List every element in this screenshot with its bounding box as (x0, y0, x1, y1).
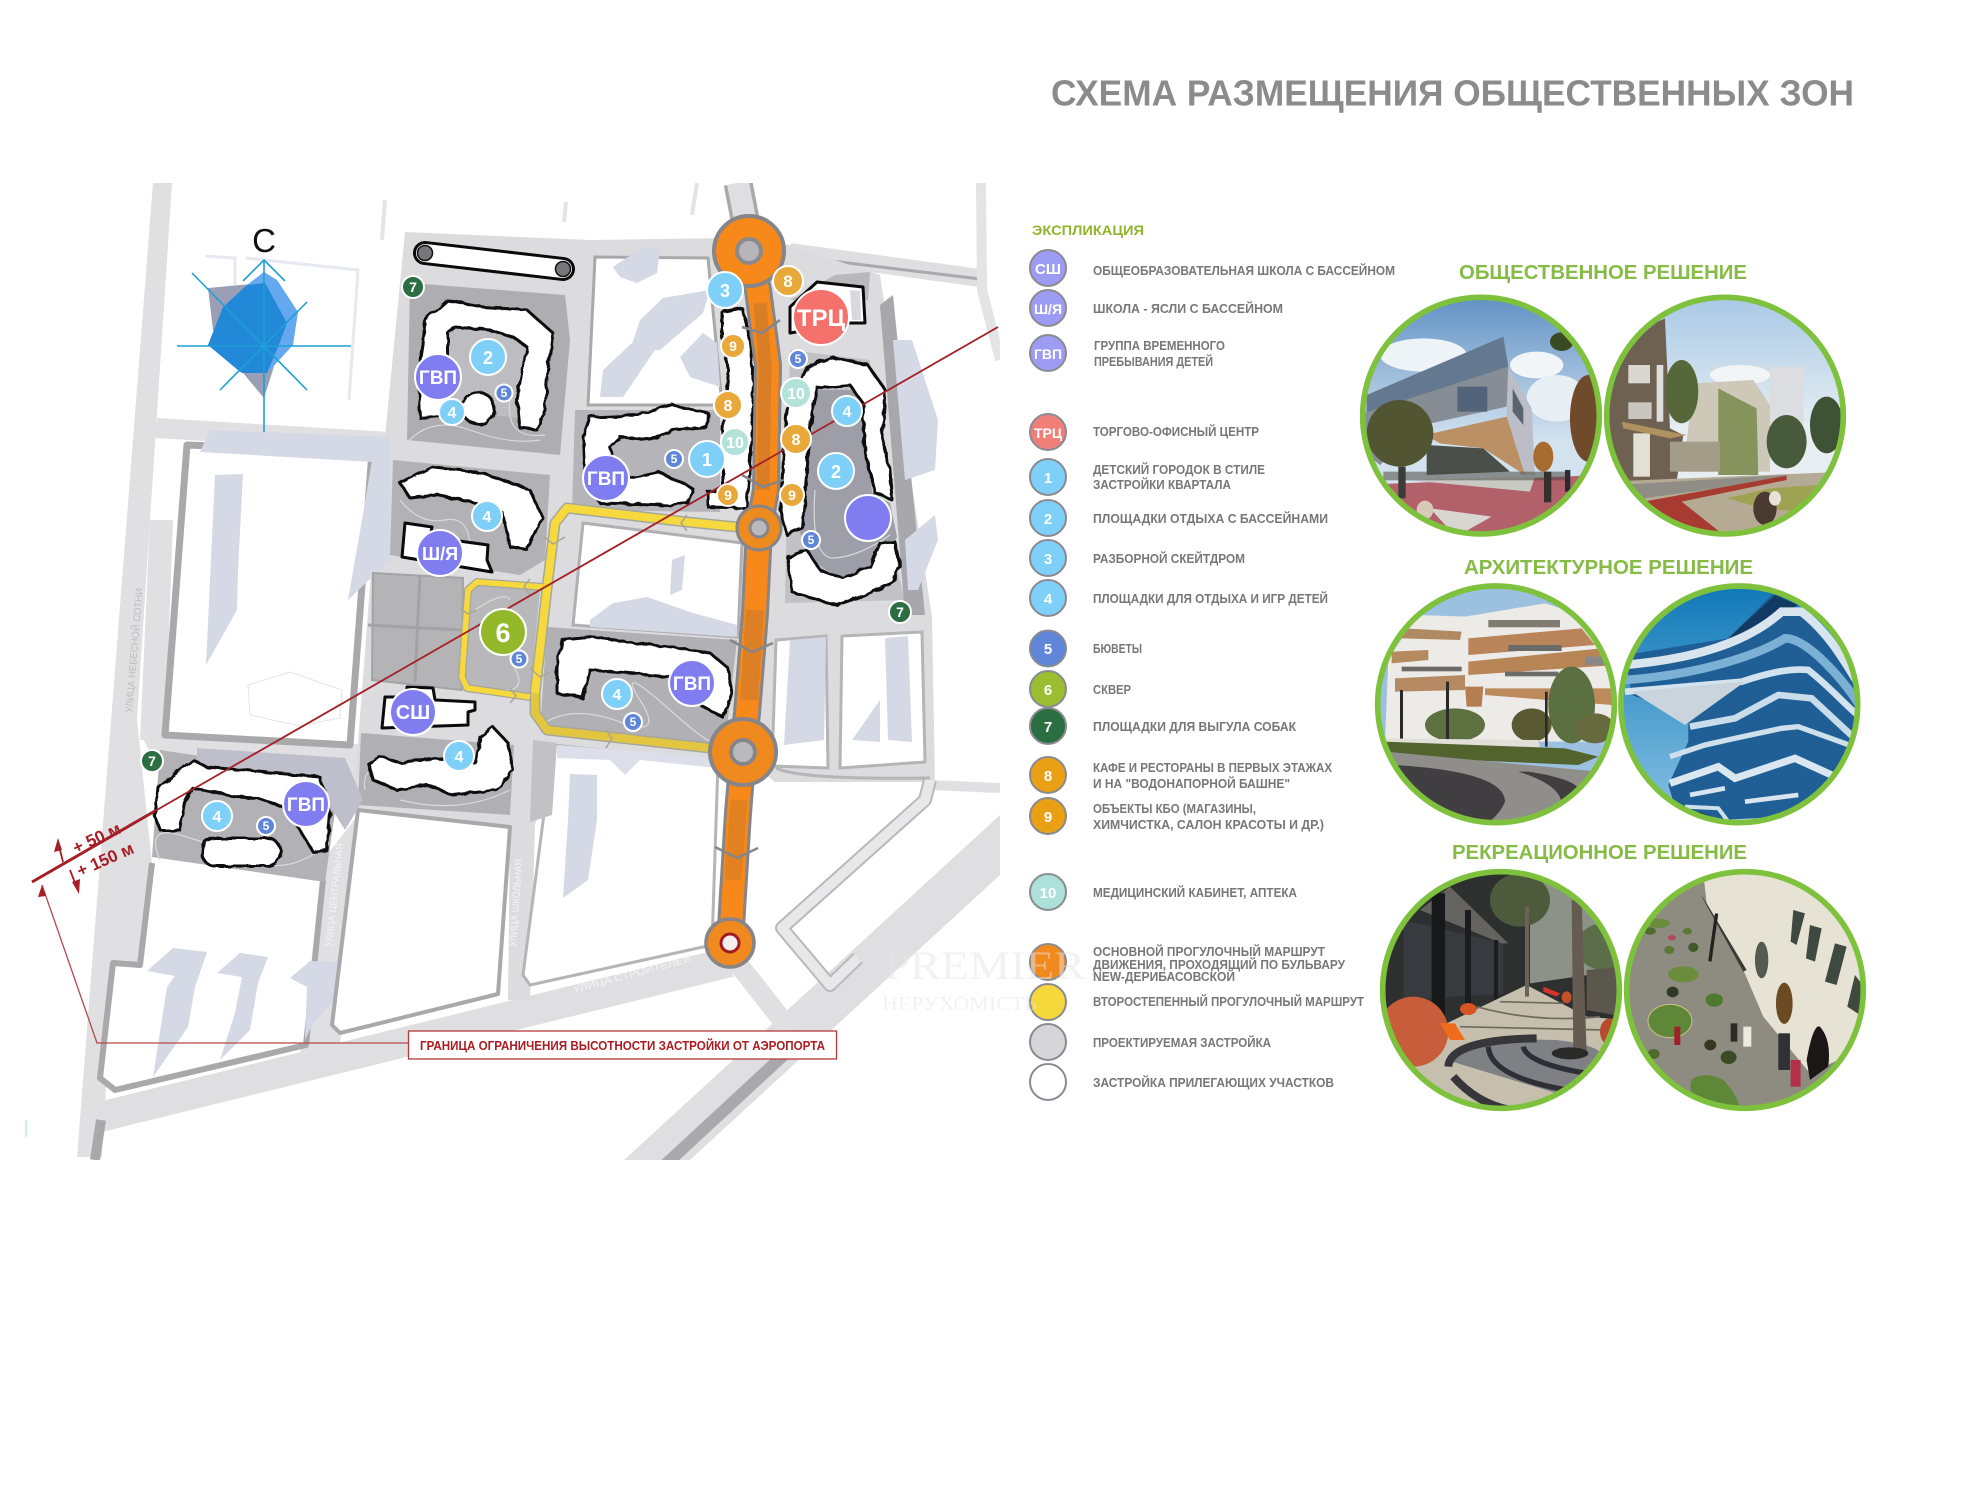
building: shopping and office centre (790, 282, 865, 333)
legend: 5: БЮВЕТЫ (1093, 641, 1142, 656)
legend: 5 (1030, 630, 1142, 666)
compass backdrop lines (205, 256, 235, 285)
central-south parcel (332, 810, 510, 1033)
marker 2: 2 (831, 462, 841, 482)
airport restriction callout (408, 1031, 836, 1059)
legend: main route (1030, 944, 1346, 984)
marker 9: 9 (788, 487, 796, 503)
legend (1030, 250, 1395, 1100)
main walking route (orange) (706, 216, 784, 967)
marker ГВП (583, 455, 629, 501)
legend: main route: NEW-ДЕРИБАСОВСКОЙ (1093, 969, 1235, 984)
marker Ш/Я: Ш/Я (422, 544, 458, 564)
marker 2 (470, 339, 506, 375)
south-east lower road curve (776, 768, 930, 778)
legend: 7 (1030, 708, 1296, 744)
marker 8 (773, 266, 803, 296)
marker 1: 1 (702, 450, 712, 470)
marker blank purple (845, 495, 891, 541)
legend: 8: 8 (1044, 768, 1052, 785)
marker 8: 8 (783, 272, 793, 291)
watermark: НЕРУХОМІСТЬ (882, 993, 1037, 1015)
legend: adjacent buildings: ЗАСТРОЙКА ПРИЛЕГАЮЩИХ УЧАСТКОВ (1093, 1075, 1334, 1090)
legend: secondary route: ВТОРОСТЕПЕННЫЙ ПРОГУЛОЧНЫЙ МАРШРУТ (1093, 994, 1364, 1009)
marker 8 (781, 424, 811, 454)
marker 4: 4 (448, 405, 457, 422)
street names: УЛИЦА ЦЕНТРАЛЬНАЯ (324, 843, 346, 947)
street names: УЛИЦА НЕБЕСНОЙ СОТНИ (122, 588, 146, 713)
legend: 3: 3 (1044, 551, 1052, 568)
legend: Ш/Я: Ш/Я (1034, 301, 1062, 317)
compass wind rose (177, 222, 351, 432)
legend: 6: 6 (1044, 682, 1052, 699)
photo: promenade with orange spheres (1378, 870, 1630, 1113)
legend: ТРЦ: ТРЦ (1034, 425, 1063, 441)
marker 4 (439, 399, 465, 425)
marker ГВП: ГВП (419, 368, 457, 389)
marker 4 (602, 679, 632, 709)
legend: ТРЦ: ТОРГОВО-ОФИСНЫЙ ЦЕНТР (1093, 424, 1259, 439)
marker 8: 8 (724, 398, 733, 415)
marker 5: 5 (630, 715, 637, 729)
marker 7 (889, 601, 911, 623)
marker ГВП (669, 660, 715, 706)
legend: СШ (1030, 250, 1395, 286)
marker 9: 9 (729, 338, 737, 354)
marker 9: 9 (724, 487, 732, 503)
legend: ГВП: ПРЕБЫВАНИЯ ДЕТЕЙ (1094, 354, 1213, 369)
yellow route arrows (460, 515, 687, 748)
legend: 3 (1030, 540, 1245, 576)
legend: 4: ПЛОЩАДКИ ДЛЯ ОТДЫХА И ИГР ДЕТЕЙ (1093, 591, 1328, 606)
marker 9 (721, 334, 745, 358)
marker 4: 4 (213, 809, 222, 826)
legend: 8 (1030, 757, 1332, 793)
heading: recreational solution: РЕКРЕАЦИОННОЕ РЕШЕНИЕ (1452, 842, 1747, 864)
marker 4 (444, 741, 474, 771)
main route chevrons (715, 320, 783, 858)
legend: planned buildings: ПРОЕКТИРУЕМАЯ ЗАСТРОЙКА (1093, 1035, 1272, 1050)
marker 5: 5 (516, 652, 523, 666)
marker СШ (390, 689, 436, 735)
photo: blue glass tower (1618, 585, 1862, 828)
height arrows and labels: + 150 м (74, 839, 137, 881)
legend: ГВП: ГРУППА ВРЕМЕННОГО (1094, 338, 1225, 353)
legend: ТРЦ (1030, 414, 1259, 450)
marker 5 (496, 384, 512, 402)
marker 5 (510, 650, 528, 668)
legend: 6 (1030, 671, 1131, 707)
legend: 8: И НА "ВОДОНАПОРНОЙ БАШНЕ" (1093, 776, 1290, 791)
courtyards (407, 283, 570, 455)
marker 5 (802, 531, 820, 549)
marker ГВП: ГВП (673, 674, 711, 695)
legend: Ш/Я: ШКОЛА - ЯСЛИ С БАССЕЙНОМ (1093, 301, 1283, 316)
marker 10: 10 (787, 386, 805, 403)
marker 5 (624, 713, 642, 731)
marker 3 (707, 272, 743, 308)
marker 4 (472, 501, 502, 531)
legend: 5: 5 (1044, 641, 1052, 658)
marker 4: 4 (455, 749, 464, 766)
legend: 10: 10 (1040, 885, 1056, 902)
marker 5: 5 (263, 819, 270, 833)
legend: 2 (1030, 500, 1328, 536)
legend: 10 (1030, 874, 1298, 910)
marker 10 (721, 428, 749, 456)
road network and parcels (77, 183, 1000, 1165)
street names (122, 588, 693, 996)
legend: 7: 7 (1044, 719, 1052, 736)
watermark (882, 943, 1085, 1015)
marker 2 (818, 453, 854, 489)
marker 9 (780, 483, 804, 507)
legend: 1: 1 (1044, 470, 1052, 487)
marker 4: 4 (613, 687, 622, 704)
marker 5 (789, 350, 807, 368)
legend: 1: ЗАСТРОЙКИ КВАРТАЛА (1093, 477, 1232, 492)
south-east parcels (772, 636, 828, 768)
legend: secondary route (1030, 984, 1364, 1020)
street names: УЛИЦА СТРОИТЕЛЕЙ (571, 952, 693, 996)
legend: 4: 4 (1044, 591, 1053, 608)
north parcel with shadows (588, 257, 722, 405)
legend: main route: ДВИЖЕНИЯ, ПРОХОДЯЩИЙ ПО БУЛЬВАРУ (1093, 957, 1346, 972)
marker 5: 5 (795, 352, 802, 366)
legend: 2: ПЛОЩАДКИ ОТДЫХА С БАССЕЙНАМИ (1093, 511, 1328, 526)
photos: public solution (1360, 295, 1847, 538)
legend: 9: ХИМЧИСТКА, САЛОН КРАСОТЫ И ДР.) (1093, 817, 1324, 832)
legend: 7: ПЛОЩАДКИ ДЛЯ ВЫГУЛА СОБАК (1093, 719, 1296, 734)
buildings (155, 300, 900, 866)
photos: recreational solution (1378, 870, 1867, 1113)
legend: 9 (1030, 798, 1324, 834)
marker ГВП (415, 354, 461, 400)
photo: library building (1360, 295, 1607, 538)
legend: 8: КАФЕ И РЕСТОРАНЫ В ПЕРВЫХ ЭТАЖАХ (1093, 760, 1332, 775)
photo: street with mixed buildings (1603, 295, 1847, 538)
legend: adjacent buildings (1030, 1064, 1334, 1100)
legend: ГВП (1030, 335, 1225, 371)
legend: ГВП: ГВП (1034, 346, 1062, 362)
marker 5 (665, 450, 683, 468)
watermark: PREMIER (884, 943, 1085, 988)
legend: 10: МЕДИЦИНСКИЙ КАБИНЕТ, АПТЕКА (1093, 885, 1298, 900)
south-west parcel (103, 926, 316, 1079)
marker 9 (717, 484, 739, 506)
marker ГВП: ГВП (587, 469, 625, 490)
marker ГВП (283, 781, 329, 827)
photo: terraced residential complex (1375, 585, 1618, 828)
marker ТРЦ: ТРЦ (797, 305, 846, 332)
marker 6: 6 (495, 618, 511, 648)
legend: 4 (1030, 580, 1328, 616)
marker 7: 7 (148, 753, 156, 769)
marker 7: 7 (409, 279, 417, 295)
marker 4: 4 (843, 404, 852, 421)
south-centre parcel (523, 745, 718, 985)
legend: 9: 9 (1044, 809, 1052, 826)
compass wind rose: С (252, 222, 276, 259)
street names: УЛИЦА ШКОЛЬНАЯ (508, 859, 525, 947)
site plan map (26, 183, 1000, 1165)
parcel between yellow route and main boulevard (573, 523, 742, 637)
photos: architectural solution (1375, 585, 1862, 828)
marker ГВП: ГВП (287, 795, 325, 816)
legend heading: ЭКСПЛИКАЦИЯ (1032, 222, 1144, 238)
marker Ш/Я (417, 530, 463, 576)
building: north bar (418, 246, 570, 276)
marker 4: 4 (483, 509, 492, 526)
marker 2: 2 (483, 348, 493, 368)
height arrows and labels: + 50 м (70, 819, 124, 858)
west parcel (165, 445, 372, 745)
legend: СШ: ОБЩЕОБРАЗОВАТЕЛЬНАЯ ШКОЛА С БАССЕЙНОМ (1093, 263, 1395, 278)
building: north U-block (418, 300, 553, 430)
legend: СШ: СШ (1035, 261, 1061, 278)
airport restriction callout: ГРАНИЦА ОГРАНИЧЕНИЯ ВЫСОТНОСТИ ЗАСТРОЙКИ ОТ АЭРОПОРТА (420, 1038, 826, 1053)
thin top ticks (382, 200, 385, 240)
courtyard paths (408, 424, 540, 442)
marker 10 (781, 378, 811, 408)
building: general school (СШ) (382, 687, 475, 728)
legend: 2: 2 (1044, 511, 1052, 528)
legend: 6: СКВЕР (1093, 682, 1131, 697)
marker 1 (689, 441, 725, 477)
marker 7 (141, 750, 163, 772)
marker 10: 10 (726, 435, 744, 452)
legend: Ш/Я (1030, 290, 1283, 326)
legend: 1: ДЕТСКИЙ ГОРОДОК В СТИЛЕ (1093, 462, 1265, 477)
heading: architectural solution: АРХИТЕКТУРНОЕ РЕШЕНИЕ (1464, 557, 1753, 579)
building: school with pool (Ш/Я) (402, 523, 492, 572)
marker 5: 5 (501, 386, 508, 400)
marker 8: 8 (792, 432, 801, 449)
marker СШ: СШ (396, 702, 430, 724)
secondary walking route (yellow) (462, 508, 737, 748)
marker 4 (832, 396, 862, 426)
marker 4 (202, 801, 232, 831)
marker 5 (257, 817, 275, 835)
heading: public solution: ОБЩЕСТВЕННОЕ РЕШЕНИЕ (1459, 262, 1747, 284)
title: СХЕМА РАЗМЕЩЕНИЯ ОБЩЕСТВЕННЫХ ЗОН (1051, 72, 1854, 114)
marker 6 (480, 609, 526, 655)
marker ТРЦ (793, 289, 849, 345)
marker 5: 5 (671, 452, 678, 466)
legend: 3: РАЗБОРНОЙ СКЕЙТДРОМ (1093, 551, 1245, 566)
photo: street from above with planters (1623, 870, 1867, 1113)
airport height restriction line (32, 327, 998, 1043)
legend: 9: ОБЪЕКТЫ КБО (МАГАЗИНЫ, (1093, 801, 1256, 816)
legend: 1 (1030, 459, 1265, 495)
marker 5: 5 (808, 533, 815, 547)
marker 8 (714, 391, 742, 419)
legend: main route: ОСНОВНОЙ ПРОГУЛОЧНЫЙ МАРШРУТ (1093, 944, 1325, 959)
marker 7: 7 (896, 604, 904, 620)
legend: planned buildings (1030, 1024, 1272, 1060)
marker 3: 3 (720, 281, 730, 301)
marker 7 (402, 276, 424, 298)
height arrows and labels (38, 819, 137, 897)
